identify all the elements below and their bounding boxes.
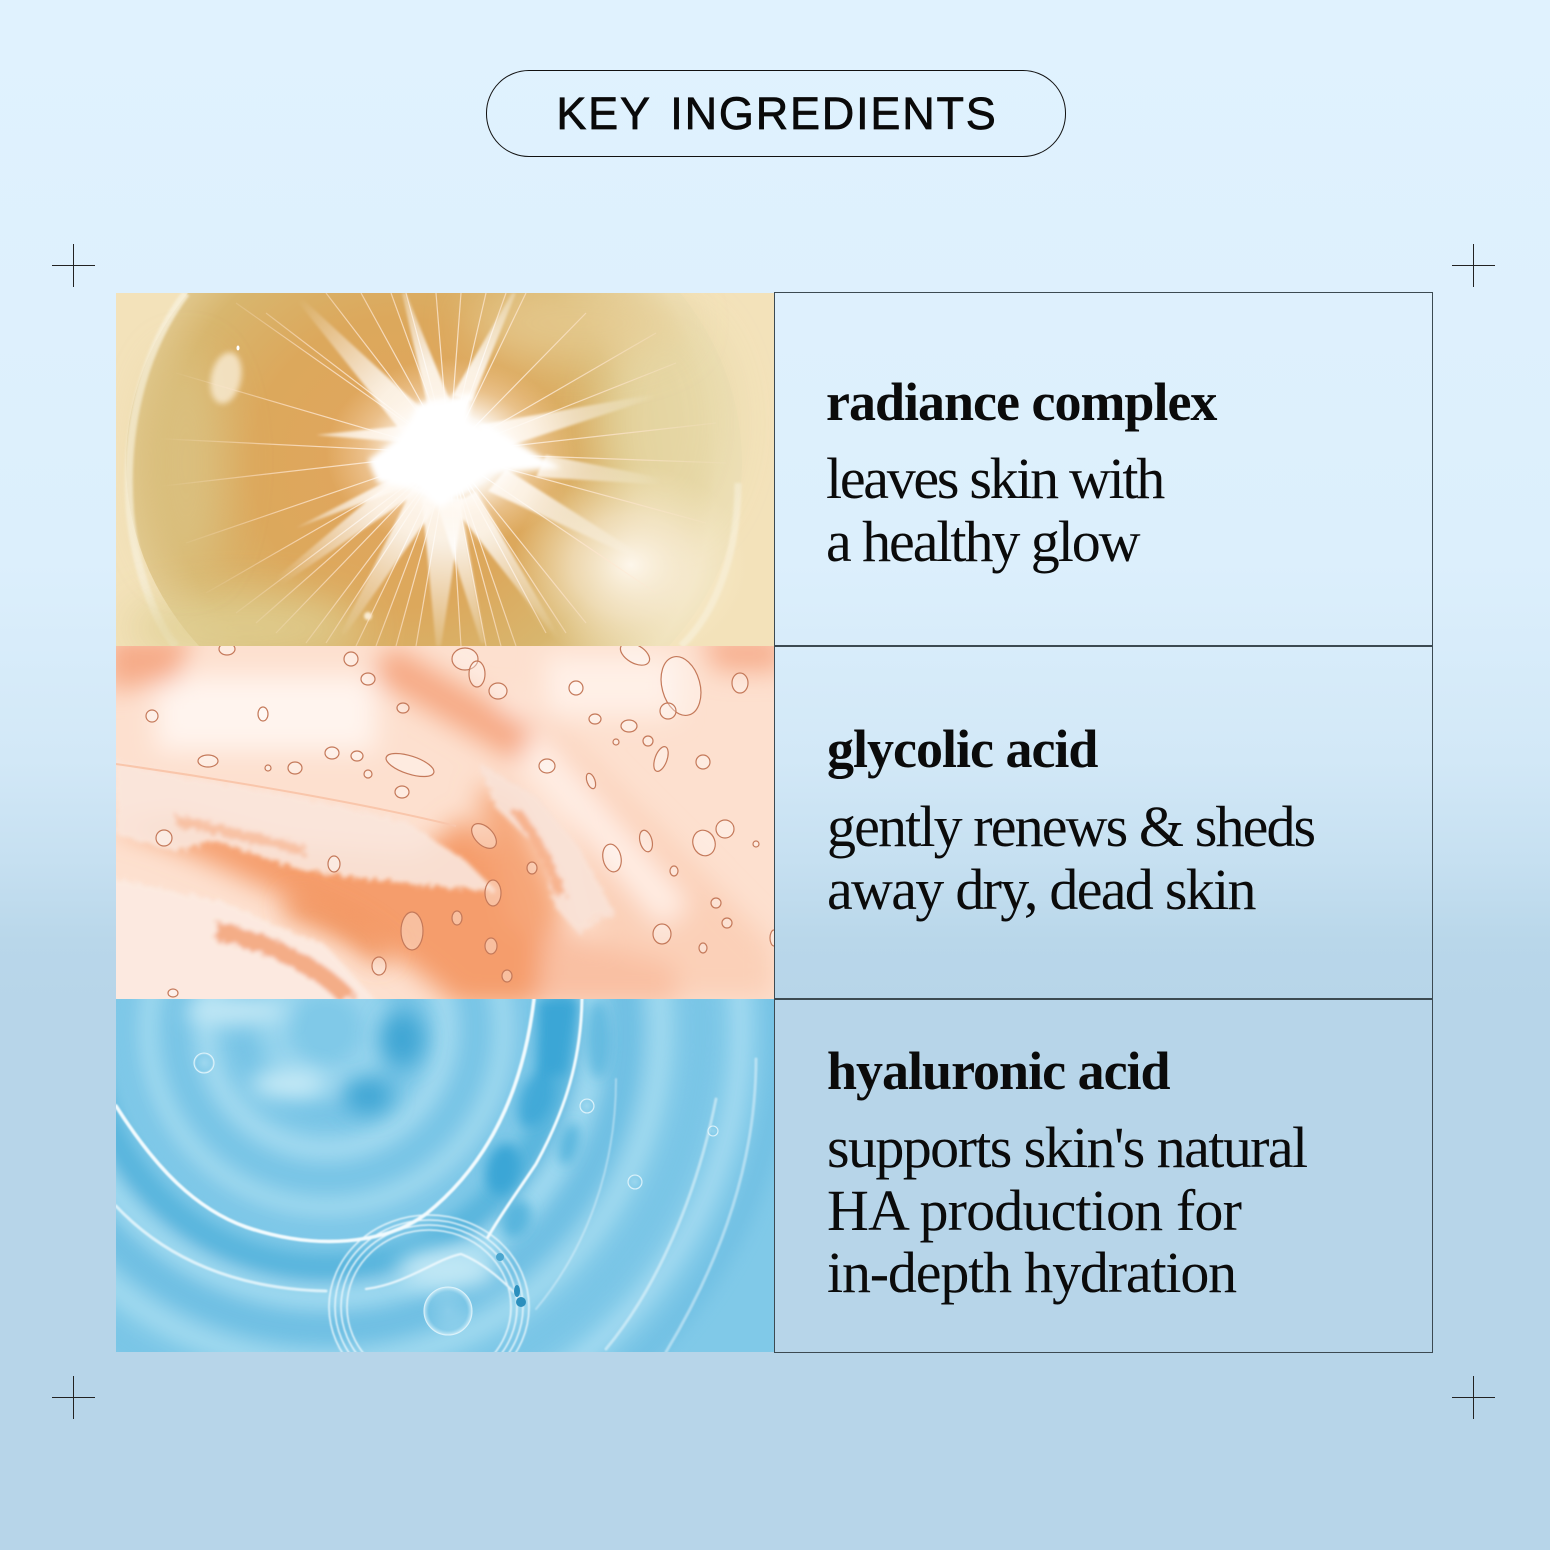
icon: dark water beads: [496, 1253, 526, 1307]
corner mark top left: [52, 244, 95, 287]
heading: radiance complex: [826, 372, 1216, 432]
title pill: KEY INGREDIENTS: [556, 88, 998, 139]
description: leaves skin with: [826, 446, 1163, 511]
heading: glycolic acid: [827, 719, 1097, 779]
description: [826, 446, 1164, 574]
image: golden radiant droplet: [116, 293, 774, 646]
heading: hyaluronic acid: [827, 1041, 1170, 1101]
description: HA production for: [827, 1178, 1241, 1242]
description: [827, 794, 1314, 922]
corner mark bottom left: [52, 1376, 95, 1419]
image: blue water ripples: [116, 999, 774, 1352]
corner mark top right: [1452, 244, 1495, 287]
image: peach gel with droplets: [116, 646, 774, 999]
panel: glycolic acid: [774, 645, 1433, 1000]
description: in-depth hydration: [827, 1240, 1236, 1305]
description: supports skin's natural: [827, 1115, 1307, 1180]
corner mark bottom right: [1452, 1376, 1495, 1419]
description: away dry, dead skin: [827, 856, 1255, 922]
panel: hyaluronic acid: [774, 998, 1433, 1353]
description: gently renews & sheds: [827, 794, 1314, 859]
description: [827, 1115, 1307, 1305]
title pill: [486, 70, 1066, 157]
panel: radiance complex: [774, 292, 1433, 647]
description: a healthy glow: [826, 508, 1138, 574]
